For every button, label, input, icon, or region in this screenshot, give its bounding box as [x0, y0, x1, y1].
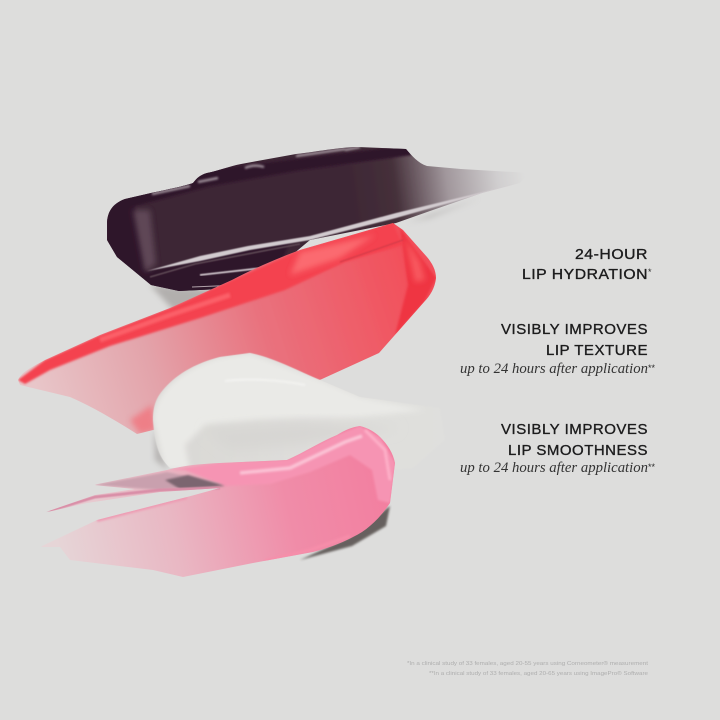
footnotes: *In a clinical study of 33 females, aged 20-55 years using Corneometer® measurement [407, 660, 648, 667]
swatch: pink balm [40, 426, 395, 577]
text: 24-hour lip hydration: * [648, 267, 652, 277]
text: 24-hour lip hydration: 24-HOUR [575, 246, 648, 263]
swatch: coral red balm [18, 223, 436, 434]
swatch: clear white balm [152, 352, 410, 468]
text: 24-hour lip hydration: LIP HYDRATION [522, 266, 648, 283]
text: lip smoothness claim: ** [648, 462, 656, 472]
text: 24-hour lip hydration [522, 246, 652, 283]
swatch: dark plum balm [107, 145, 530, 295]
text: lip smoothness claim: LIP SMOOTHNESS [508, 442, 648, 459]
text: lip texture claim [460, 321, 656, 377]
text: lip texture claim: LIP TEXTURE [546, 342, 648, 359]
text: lip smoothness claim: up to 24 hours after application [460, 460, 648, 476]
text: lip smoothness claim [460, 421, 656, 476]
footnotes: **In a clinical study of 33 females, aged 20-65 years using ImagePro® Software [429, 670, 648, 677]
text: lip smoothness claim: VISIBLY IMPROVES [501, 421, 648, 438]
footnotes [407, 660, 648, 677]
swatch shadows [150, 198, 480, 560]
text: lip texture claim: ** [648, 363, 656, 373]
text: lip texture claim: up to 24 hours after application [460, 361, 648, 377]
text: lip texture claim: VISIBLY IMPROVES [501, 321, 648, 338]
